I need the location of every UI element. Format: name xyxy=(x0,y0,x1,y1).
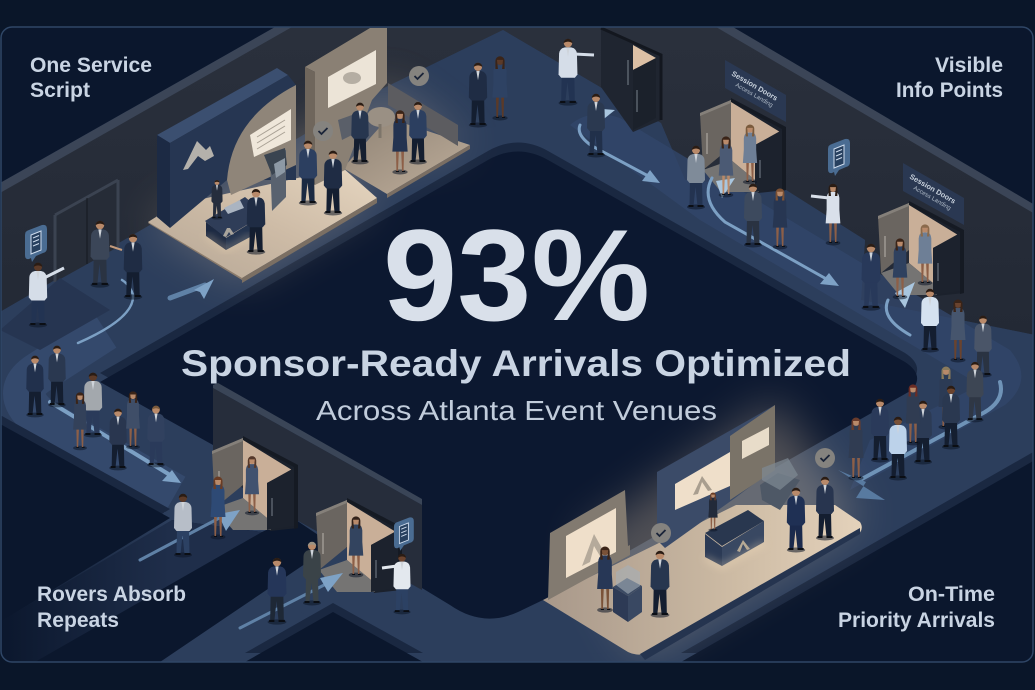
sponsor pedestal xyxy=(613,565,642,622)
info kiosk xyxy=(264,148,287,211)
lower-right void xyxy=(681,460,1035,662)
icon: check badge reception xyxy=(313,121,333,141)
door: closed entrance west xyxy=(0,180,118,350)
door: session door two xyxy=(878,201,964,296)
staff and guests: east queue xyxy=(848,362,984,480)
label: rovers absorb repeats: Repeats xyxy=(37,609,119,632)
booth wall: sponsor left xyxy=(548,490,630,600)
booth wall: sponsor right xyxy=(657,405,775,548)
sign: session door two: Session Doors xyxy=(908,172,957,206)
label: rovers absorb repeats xyxy=(37,583,186,632)
label: one service script: Script xyxy=(30,79,90,102)
staff and guests: south corridor xyxy=(174,456,411,625)
booth wall: lounge xyxy=(305,28,387,185)
sign: session door one: Access Landing xyxy=(734,83,774,109)
icon: document bubble east xyxy=(828,139,850,176)
sponsor desk xyxy=(705,510,764,567)
booth floor: reception xyxy=(148,168,377,283)
top wall xyxy=(0,27,1035,335)
door: lower left xyxy=(212,436,298,531)
subheading: Across Atlanta Event Venues xyxy=(316,395,717,426)
icon: check badge lounge xyxy=(409,66,429,86)
label: rovers absorb repeats: Rovers Absorb xyxy=(37,583,186,606)
door: north closed xyxy=(601,28,661,132)
booth wall: navy with logo xyxy=(157,68,296,228)
staff and guests: north corridor xyxy=(559,39,992,377)
sign: session door two: Access Landing xyxy=(912,186,952,212)
fading band bottom left xyxy=(48,520,262,654)
booth: upper glow xyxy=(148,83,470,280)
staff and guests: sponsor booth xyxy=(597,477,834,618)
arrows: wayfinding paths xyxy=(50,125,1001,628)
sign: session door one: Session Doors xyxy=(730,69,779,103)
central dark hole xyxy=(100,152,917,619)
door: session door one xyxy=(700,98,786,193)
top-right corner void xyxy=(733,27,1035,205)
icon: document bubble west xyxy=(25,225,47,262)
booth floor: lower sponsor area xyxy=(543,400,862,660)
main statistic: 93% xyxy=(383,202,650,348)
headline: Sponsor-Ready Arrivals Optimized xyxy=(181,343,851,384)
bottom void xyxy=(245,612,423,662)
lower-left hole xyxy=(2,425,170,604)
walkway lighter left path xyxy=(24,330,175,495)
label: on-time priority arrivals: On-Time xyxy=(908,583,995,606)
label: one service script: One Service xyxy=(30,54,152,77)
lower-left void xyxy=(38,520,318,662)
sponsor glass display xyxy=(760,458,800,510)
icon: check badge sponsor right xyxy=(815,448,835,468)
staff and guests: west queue xyxy=(26,346,165,470)
icon: check badge sponsor left xyxy=(651,523,671,543)
sign: session door two xyxy=(903,163,964,225)
hole rims xyxy=(0,142,1035,653)
staff and guests: reception booth xyxy=(29,56,508,328)
label: visible info points xyxy=(896,54,1003,102)
booth floor: lounge xyxy=(343,118,470,198)
label: visible info points: Info Points xyxy=(896,79,1003,102)
arrowheads xyxy=(162,108,915,592)
sign: session door one xyxy=(725,60,786,122)
label: on-time priority arrivals: Priority Arrivals xyxy=(838,609,995,632)
door: lower right xyxy=(316,498,402,593)
lounge counter and table xyxy=(338,83,458,146)
booth panel: curved beige xyxy=(227,85,296,195)
label: one service script xyxy=(30,54,152,102)
reception desk xyxy=(205,197,250,250)
label: visible info points: Visible xyxy=(935,54,1003,77)
top-left corner void xyxy=(0,27,275,183)
floor walkway north xyxy=(4,115,1032,490)
label: on-time priority arrivals xyxy=(838,583,995,632)
wall: lower doors xyxy=(213,383,422,590)
icon: exit bubble south xyxy=(394,517,414,551)
